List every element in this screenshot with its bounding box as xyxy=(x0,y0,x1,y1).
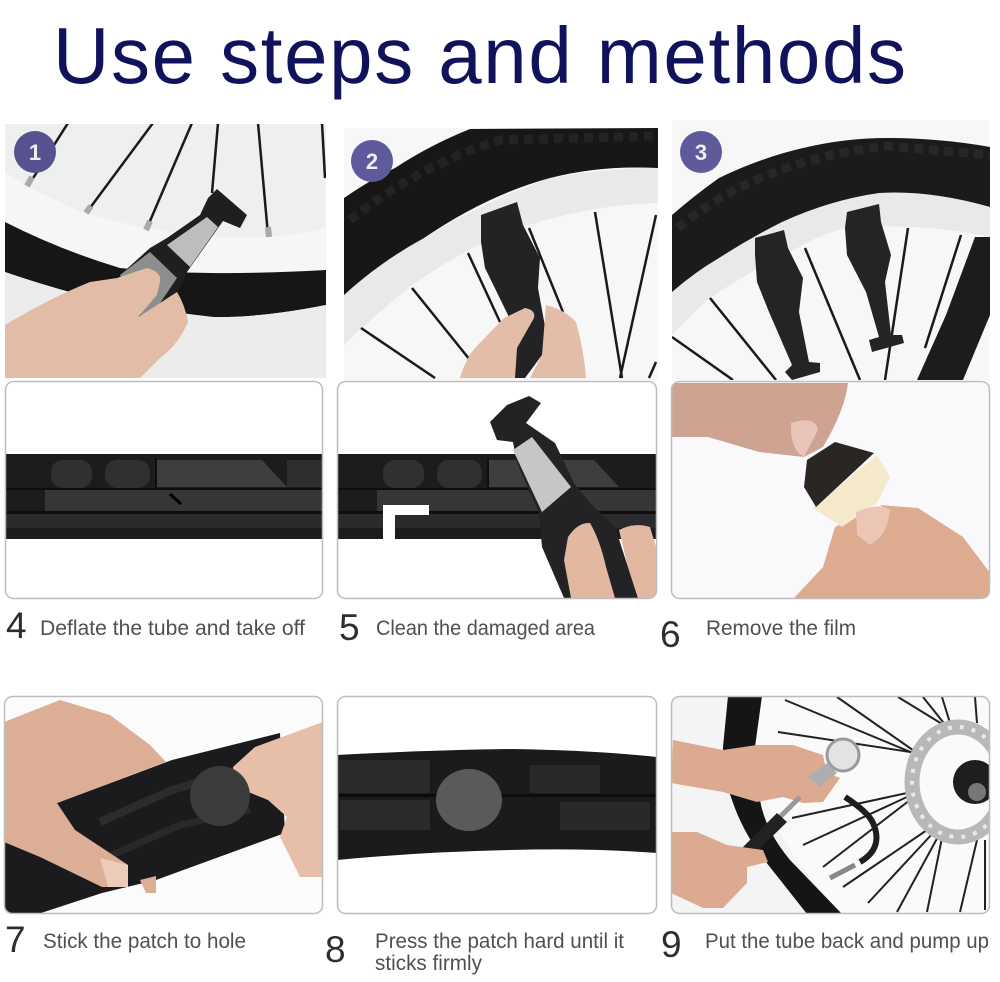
upper hand xyxy=(671,383,848,457)
left hand xyxy=(4,700,166,887)
step 5 number: 5 xyxy=(339,607,360,648)
gauge xyxy=(827,739,859,771)
valve xyxy=(830,865,855,878)
icon: tire lever right xyxy=(845,204,904,352)
step 4 label: Deflate the tube and take off xyxy=(40,617,305,640)
icon: tire lever xyxy=(481,202,546,378)
icon: tire lever tool xyxy=(120,189,247,318)
panel: step 2 photo xyxy=(344,128,658,380)
panel: step 6 photo xyxy=(671,381,990,599)
step 5 label: Clean the damaged area xyxy=(376,617,595,640)
step 7 number: 7 xyxy=(5,919,26,960)
step 8 label: Press the patch hard until it xyxy=(375,930,624,953)
rim xyxy=(672,193,990,335)
wheel interior xyxy=(755,696,990,914)
step 8 number: 8 xyxy=(325,929,346,970)
panel: step 4 photo xyxy=(6,454,322,539)
tire xyxy=(672,138,990,292)
patch xyxy=(436,769,502,831)
step badge 3: 3 xyxy=(695,140,707,165)
inner tube xyxy=(337,749,657,860)
inner tube xyxy=(4,733,285,914)
lower hand xyxy=(671,832,768,908)
title: Use steps and methods xyxy=(53,11,906,100)
panel: step 9 photo xyxy=(671,696,1000,914)
step badge 1 xyxy=(14,131,56,173)
step 8 label xyxy=(375,930,624,975)
inner tube xyxy=(5,454,323,539)
thumb nail xyxy=(100,858,128,887)
hand xyxy=(564,523,656,598)
panel: step 3 photo xyxy=(672,120,990,380)
step 8 label: sticks firmly xyxy=(375,952,482,975)
hand xyxy=(460,305,586,378)
panel: step 1 photo xyxy=(5,123,326,378)
brake disc xyxy=(912,727,1000,837)
step 6 number: 6 xyxy=(660,614,681,655)
lower hand xyxy=(794,505,990,598)
spokes xyxy=(30,123,325,235)
tire xyxy=(344,128,658,295)
silver cylinder xyxy=(807,763,837,787)
spokes xyxy=(778,697,985,912)
spoke nipples xyxy=(27,177,269,237)
rim xyxy=(5,172,326,274)
icon: tire lever tool xyxy=(490,396,638,598)
hand xyxy=(5,268,188,378)
step badge 2 xyxy=(351,140,393,182)
inner tube xyxy=(337,454,657,539)
tire xyxy=(5,222,326,317)
right hand xyxy=(233,722,323,877)
step 9 label: Put the tube back and pump up xyxy=(705,930,989,953)
tire xyxy=(723,696,842,914)
patch xyxy=(804,442,874,507)
finger xyxy=(140,876,156,893)
upper hand xyxy=(671,740,840,803)
panel: step 5 photo xyxy=(337,381,657,599)
pump handle xyxy=(730,813,787,865)
step 4 number: 4 xyxy=(6,605,27,646)
icon: tire lever left xyxy=(755,230,820,380)
panel: step 7 photo xyxy=(4,696,323,914)
step badge 1: 1 xyxy=(29,140,41,165)
step 6 label: Remove the film xyxy=(706,617,856,640)
pump shaft xyxy=(780,797,800,817)
patch xyxy=(190,766,250,826)
fork xyxy=(917,237,990,380)
step badge 3 xyxy=(680,131,722,173)
spokes xyxy=(361,212,656,378)
white patch xyxy=(383,505,429,542)
step 9 number: 9 xyxy=(661,924,682,965)
spokes xyxy=(672,228,961,380)
thumb nail xyxy=(856,506,890,545)
panel: step 8 photo xyxy=(337,696,657,914)
rim xyxy=(344,168,658,345)
foam backing xyxy=(813,455,890,527)
step badge 2: 2 xyxy=(366,149,378,174)
step 7 label: Stick the patch to hole xyxy=(43,930,246,953)
hose xyxy=(845,797,876,862)
